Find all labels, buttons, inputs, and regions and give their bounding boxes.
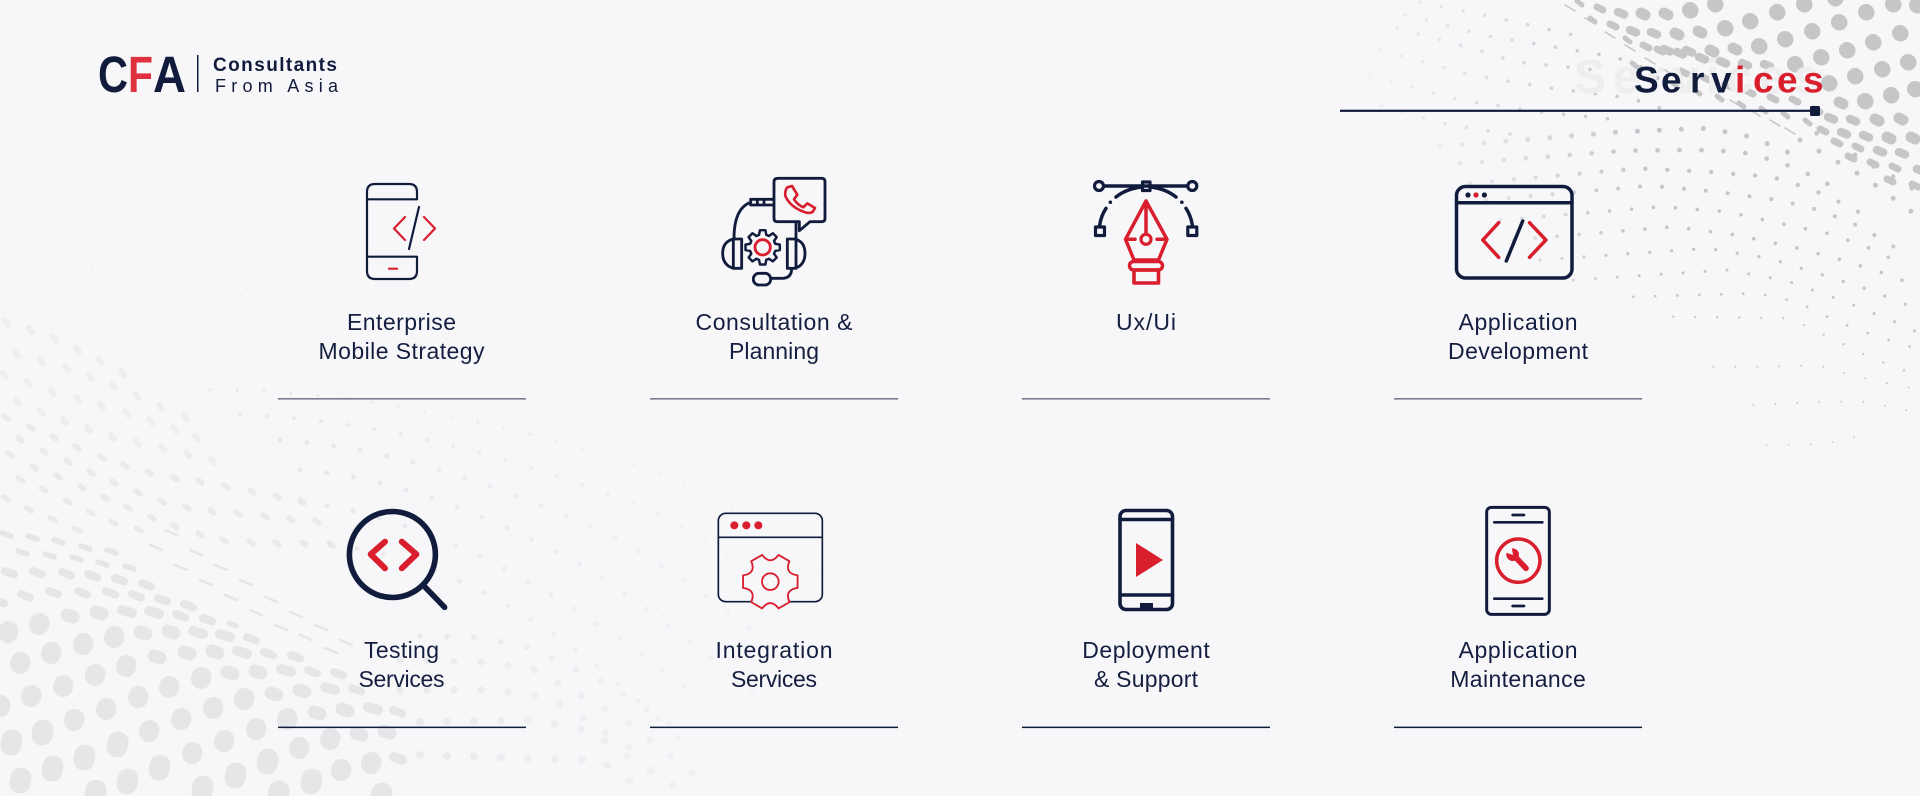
panel: Consultation & Planning [650,178,898,400]
label: Consultation & [696,309,852,335]
label: Maintenance [1450,666,1586,692]
title text: ices [1735,60,1824,100]
label [696,309,852,364]
panel: Application Development [1394,186,1642,400]
logo mark: CFA: A [153,46,186,103]
icon: window with gear [718,513,822,608]
ghost title: Services [1574,51,1820,104]
label: Planning [729,338,819,364]
label [716,637,832,692]
rule [278,727,526,728]
label: Ux/Ui [1116,309,1176,335]
title rule with end square [1340,106,1820,116]
label: Application [1458,637,1578,663]
label: Testing [364,637,439,663]
label: Deployment [1082,637,1210,663]
background halftone: bottom left [0,190,1160,796]
label: Services [358,666,444,692]
label: & Support [1094,666,1199,692]
icon: code window [1456,186,1572,278]
logo wordmark: From Asia [215,76,339,96]
label: Integration [716,637,832,663]
rule [650,727,898,728]
rule [1022,727,1270,728]
rule [650,398,898,400]
icon: phone with wrench [1487,507,1549,614]
rule [1022,398,1270,400]
label: Application [1458,309,1578,335]
label: Enterprise [347,309,456,335]
label: Development [1448,338,1589,364]
icon: magnifier with code [349,512,445,607]
logo mark: CFA [98,46,186,103]
label [358,637,444,692]
logo wordmark [213,55,339,96]
label [1448,309,1589,364]
panel: Application Maintenance [1394,507,1642,728]
rule [1394,727,1642,728]
icon: pen tool [1094,182,1197,283]
icon: mobile with code [367,184,435,279]
logo wordmark: Consultants [213,55,337,76]
panel: Enterprise Mobile Strategy [278,184,526,400]
logo divider [197,55,198,92]
label: Mobile Strategy [318,338,485,364]
rule [1394,398,1642,400]
icon: headset, gear and call bubble [723,178,825,285]
label [1450,637,1586,692]
label [1082,637,1210,692]
title text: Serv [1634,60,1732,100]
title: Services [1340,51,1824,116]
label: Services [731,666,817,692]
panel: Integration Services [650,513,898,728]
logo mark: CFA: C [98,46,128,103]
label [318,309,485,364]
logo mark: CFA: F [128,46,153,103]
logo [98,46,339,103]
panel: Testing Services [278,512,526,728]
rule [278,398,526,400]
panel: Deployment & Support [1022,510,1270,728]
panel: Ux/Ui [1022,182,1270,400]
background halftone: top right [1360,0,1920,445]
icon: phone with play button [1120,510,1172,611]
